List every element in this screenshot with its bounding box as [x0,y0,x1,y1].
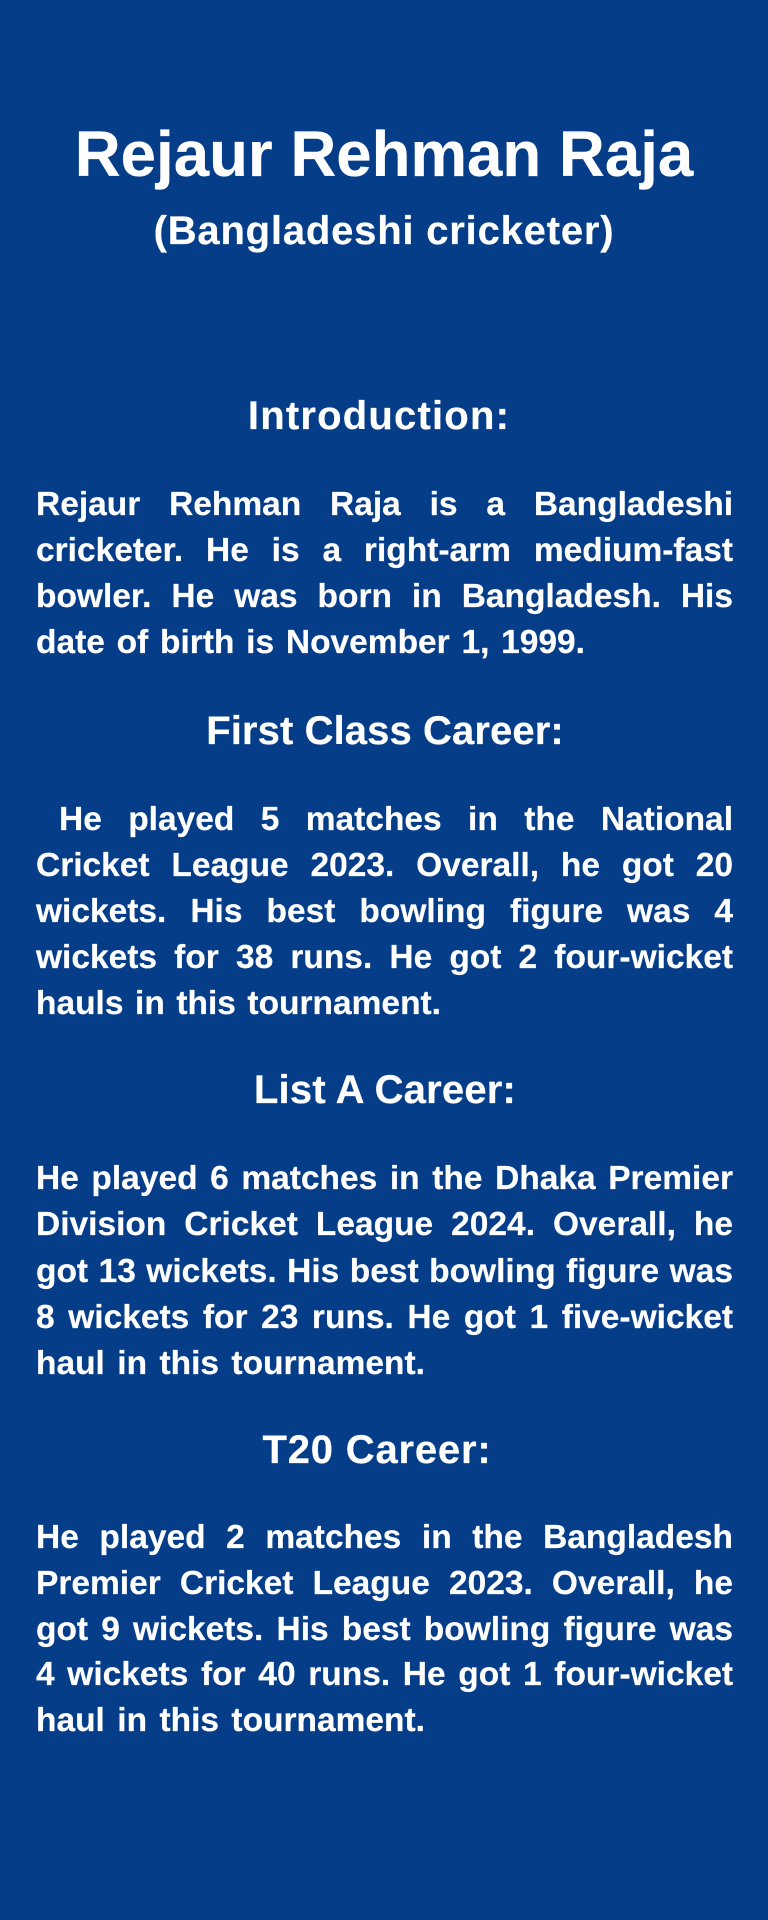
text block: first class career: He played 5 matches in the National [59,801,733,838]
text block: introduction: Rejaur Rehman Raja is a Bangladeshi [36,486,733,523]
text block: first class career: wickets. His best bowling figure was 4 [36,893,733,930]
text block: introduction: cricketer. He is a right-arm medium-fast [36,532,733,569]
text block: list a career: He played 6 matches in the Dhaka Premier [36,1160,733,1197]
text block: t20 career: He played 2 matches in the Bangladesh [36,1519,733,1556]
text block: first class career: wickets for 38 runs. He got 2 four-wicket [36,939,733,976]
title: Rejaur Rehman Raja [75,118,693,190]
subtitle: (Bangladeshi cricketer) [154,209,614,253]
text block: list a career: 8 wickets for 23 runs. He got 1 five-wicket [36,1299,733,1336]
text block: list a career: haul in this tournament. [36,1345,425,1382]
heading: list a career: List A Career: [254,1068,516,1112]
text block: first class career [36,801,733,1022]
text block: first class career: Cricket League 2023. Overall, he got 20 [36,847,733,884]
text block: t20 career: haul in this tournament. [36,1702,425,1739]
text block: t20 career: Premier Cricket League 2023. Overall, he [36,1565,733,1602]
text block: introduction [36,486,733,661]
heading: introduction: Introduction: [248,394,510,438]
text block: t20 career [36,1519,733,1739]
text block: introduction: bowler. He was born in Bangladesh. His [36,578,733,615]
text block: list a career: Division Cricket League 2024. Overall, he [36,1206,733,1243]
heading: t20 career: T20 Career: [263,1428,491,1472]
text block: t20 career: got 9 wickets. His best bowling figure was [36,1610,733,1648]
text block: first class career: hauls in this tournament. [36,985,441,1022]
text block: introduction: date of birth is November 1, 1999. [36,624,585,661]
text block: t20 career: 4 wickets for 40 runs. He got 1 four-wicket [36,1656,733,1693]
text block: list a career [36,1160,733,1382]
text block: list a career: got 13 wickets. His best bowling figure was [36,1252,733,1290]
heading: first class career: First Class Career: [206,709,564,753]
